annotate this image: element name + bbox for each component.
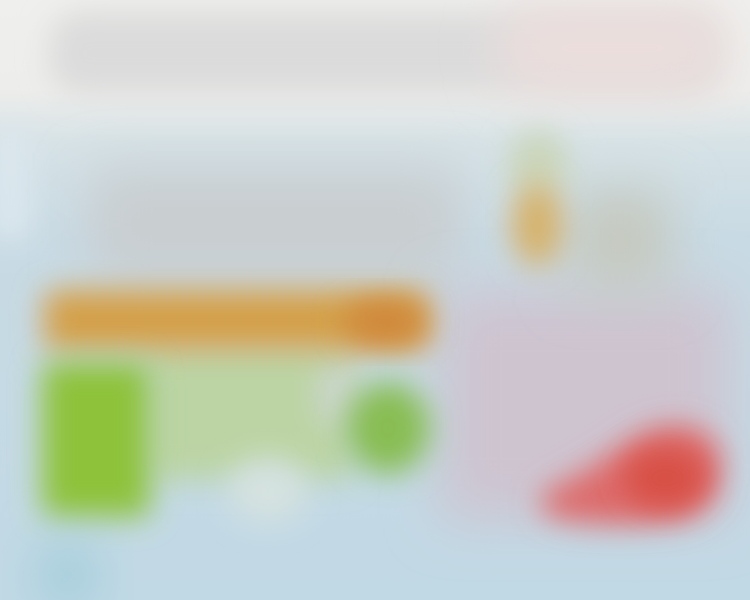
green circle (346, 382, 430, 474)
pale highlight (228, 458, 308, 522)
red shape (540, 425, 720, 524)
right muted panel (440, 190, 730, 520)
blue corner patch (38, 541, 98, 600)
header band (50, 6, 725, 94)
left edge glow (0, 130, 30, 240)
yellow icon (511, 183, 563, 267)
green block (42, 362, 150, 517)
upper muted panel (90, 170, 460, 280)
orange heading bar (44, 290, 429, 350)
light green panel (150, 345, 350, 480)
pale highlight upper (316, 359, 360, 431)
yellow icon top (508, 131, 568, 199)
orange bar right accent (343, 300, 427, 344)
